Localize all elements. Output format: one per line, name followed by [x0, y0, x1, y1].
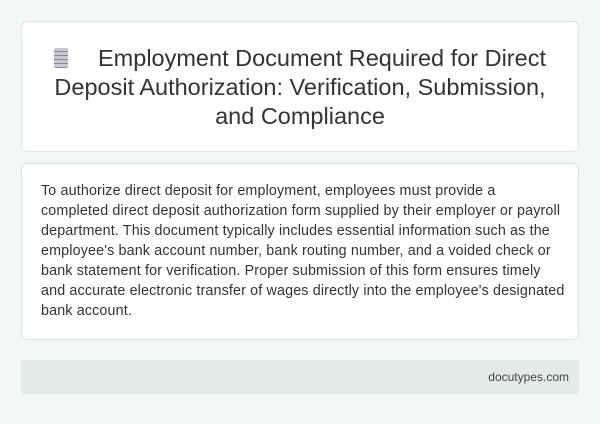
icon: document — [54, 48, 68, 68]
text block: employee's bank account number, bank routing number, and a voided check or — [41, 243, 551, 259]
text block: and accurate electronic transfer of wages directly into the employee's designated — [41, 283, 565, 299]
text block: To authorize direct deposit for employment, employees must provide a — [41, 183, 495, 199]
panel: header — [21, 21, 579, 152]
text block: bank statement for verification. Proper submission of this form ensures timely — [41, 263, 541, 279]
text block: completed direct deposit authorization form supplied by their employer or payroll — [41, 203, 560, 219]
panel: body text — [21, 163, 579, 340]
footer text: docutypes.com — [488, 370, 569, 384]
text block: department. This document typically includes essential information such as the — [41, 223, 550, 239]
text block — [41, 183, 565, 319]
text block: bank account. — [41, 303, 132, 319]
title: Employment Document Required for Direct Deposit Authorization: Verification, Submission, and Compliance — [54, 45, 546, 129]
footer — [21, 360, 579, 394]
